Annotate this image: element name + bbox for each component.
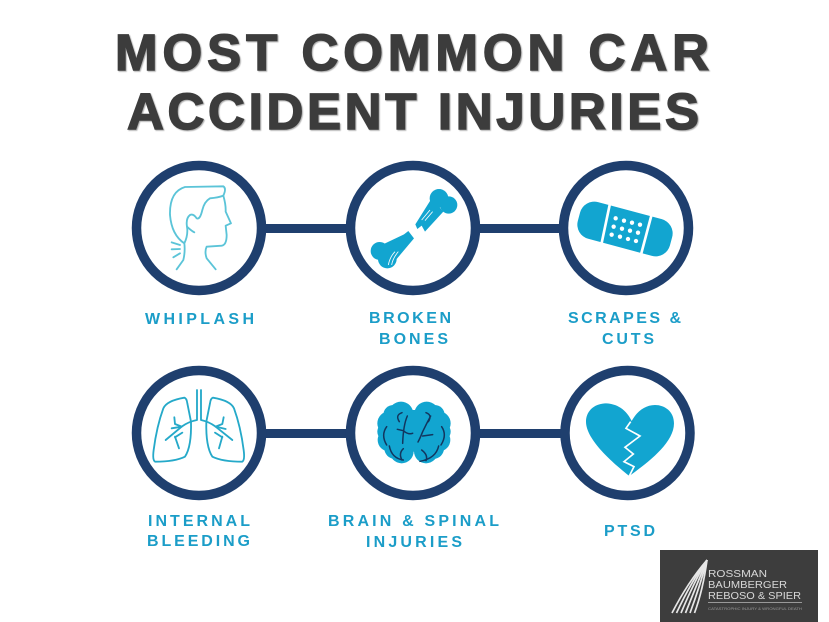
label: brain and spinal injuries xyxy=(328,513,499,551)
connector lines xyxy=(262,224,566,438)
logo text: BAUMBERGER xyxy=(708,579,787,591)
panel: brain and spinal injuries xyxy=(328,370,499,551)
icon: bandage xyxy=(574,198,676,260)
panel: scrapes and cuts xyxy=(564,166,688,348)
icon: brain xyxy=(377,402,451,463)
label: brain and spinal injuries: BRAIN & SPINAL xyxy=(328,513,499,530)
icon: head and neck xyxy=(170,186,231,269)
icon: lungs xyxy=(153,390,244,462)
label: internal bleeding: BLEEDING xyxy=(147,533,250,550)
logo xyxy=(660,550,818,622)
icon: broken bone xyxy=(371,189,457,268)
label: internal bleeding: INTERNAL xyxy=(148,513,250,530)
logo text: REBOSO & SPIER xyxy=(708,590,801,602)
label: broken bones xyxy=(369,310,451,348)
title: MOST COMMON CAR xyxy=(115,24,709,81)
logo text xyxy=(708,568,802,611)
title: ACCIDENT INJURIES xyxy=(127,83,699,140)
logo text: CATASTROPHIC INJURY & WRONGFUL DEATH xyxy=(708,606,802,611)
label: scrapes and cuts: SCRAPES & xyxy=(568,310,681,327)
label: brain and spinal injuries: INJURIES xyxy=(366,534,462,551)
panel: whiplash xyxy=(136,166,262,328)
panel: ptsd xyxy=(565,370,690,540)
icon: broken heart xyxy=(586,403,674,476)
icon: logo arch xyxy=(672,560,707,613)
label: scrapes and cuts xyxy=(568,310,681,348)
label: broken bones: BROKEN xyxy=(369,310,451,327)
label: broken bones: BONES xyxy=(379,331,448,348)
label: whiplash: WHIPLASH xyxy=(145,311,254,328)
panel: internal bleeding xyxy=(136,370,262,550)
label: internal bleeding xyxy=(147,513,250,550)
title xyxy=(115,24,709,140)
label: ptsd: PTSD xyxy=(604,523,655,540)
logo text: ROSSMAN xyxy=(708,568,767,580)
label: scrapes and cuts: CUTS xyxy=(602,331,654,348)
panel: broken bones xyxy=(350,166,476,348)
